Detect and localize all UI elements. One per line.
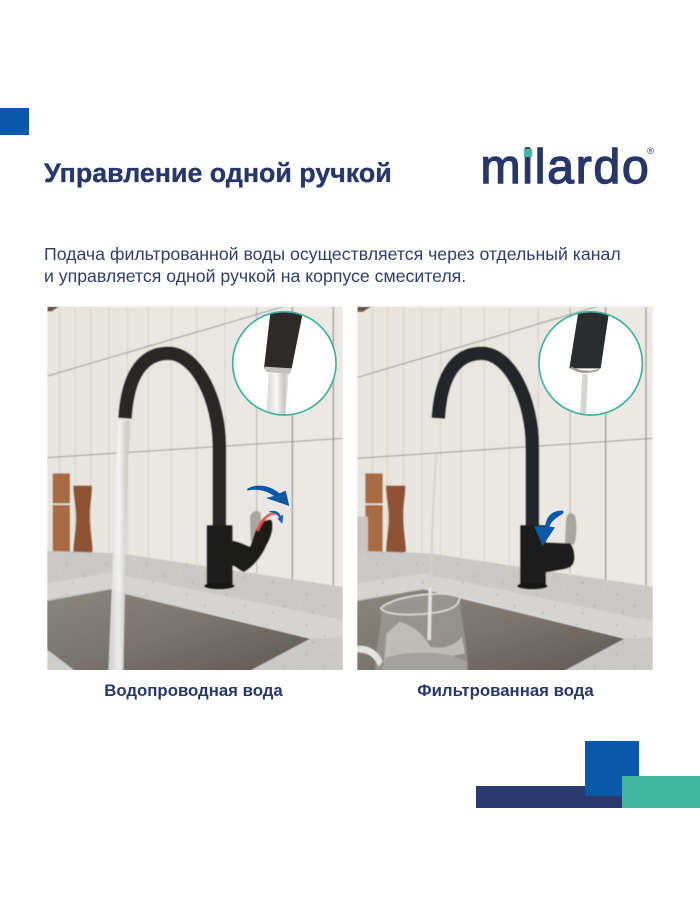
title: Управление одной ручкой: [44, 158, 392, 188]
glass pitcher: [353, 594, 468, 673]
photo panel: tap water: [43, 303, 347, 673]
photo panel: filtered water: [353, 303, 657, 673]
logo: milardo: [480, 141, 654, 194]
sink: [353, 589, 625, 673]
pepper mills: [357, 472, 406, 553]
navy block: [476, 786, 623, 808]
sink: [43, 589, 311, 673]
water stream: [108, 421, 132, 672]
teal block: [622, 776, 700, 808]
arrow: large blue: [247, 486, 289, 506]
caption: filtered water: Фильтрованная вода: [417, 681, 594, 700]
wall tiles: [43, 303, 347, 593]
inset circle: filtered stream: [539, 310, 642, 415]
corner accent square: [0, 108, 29, 135]
water inside pitcher: [427, 587, 432, 640]
inset circle: water stream: [233, 310, 336, 415]
blue block: [585, 741, 639, 796]
faucet body: [517, 513, 577, 589]
corner decoration blocks: [476, 741, 700, 808]
countertop: [43, 551, 347, 673]
description text: [44, 244, 621, 286]
arrow: small blue: [268, 511, 283, 524]
logo teal dot: [524, 148, 532, 156]
arrow: blue down: [534, 511, 563, 546]
logo wordmark: milardo: [480, 141, 650, 194]
faucet body: [204, 511, 277, 589]
faucet spout: [438, 353, 532, 527]
water stream: [430, 454, 438, 554]
description text: и управляется одной ручкой на корпусе смесителя.: [44, 266, 466, 286]
pepper mills: [52, 472, 94, 553]
caption: tap water: Водопроводная вода: [104, 681, 283, 700]
countertop: [353, 551, 657, 673]
wall tiles: [353, 303, 657, 593]
logo registered mark: ®: [647, 146, 654, 157]
description text: Подача фильтрованной воды осуществляется через отдельный канал: [44, 244, 621, 264]
faucet spout: [125, 353, 219, 527]
